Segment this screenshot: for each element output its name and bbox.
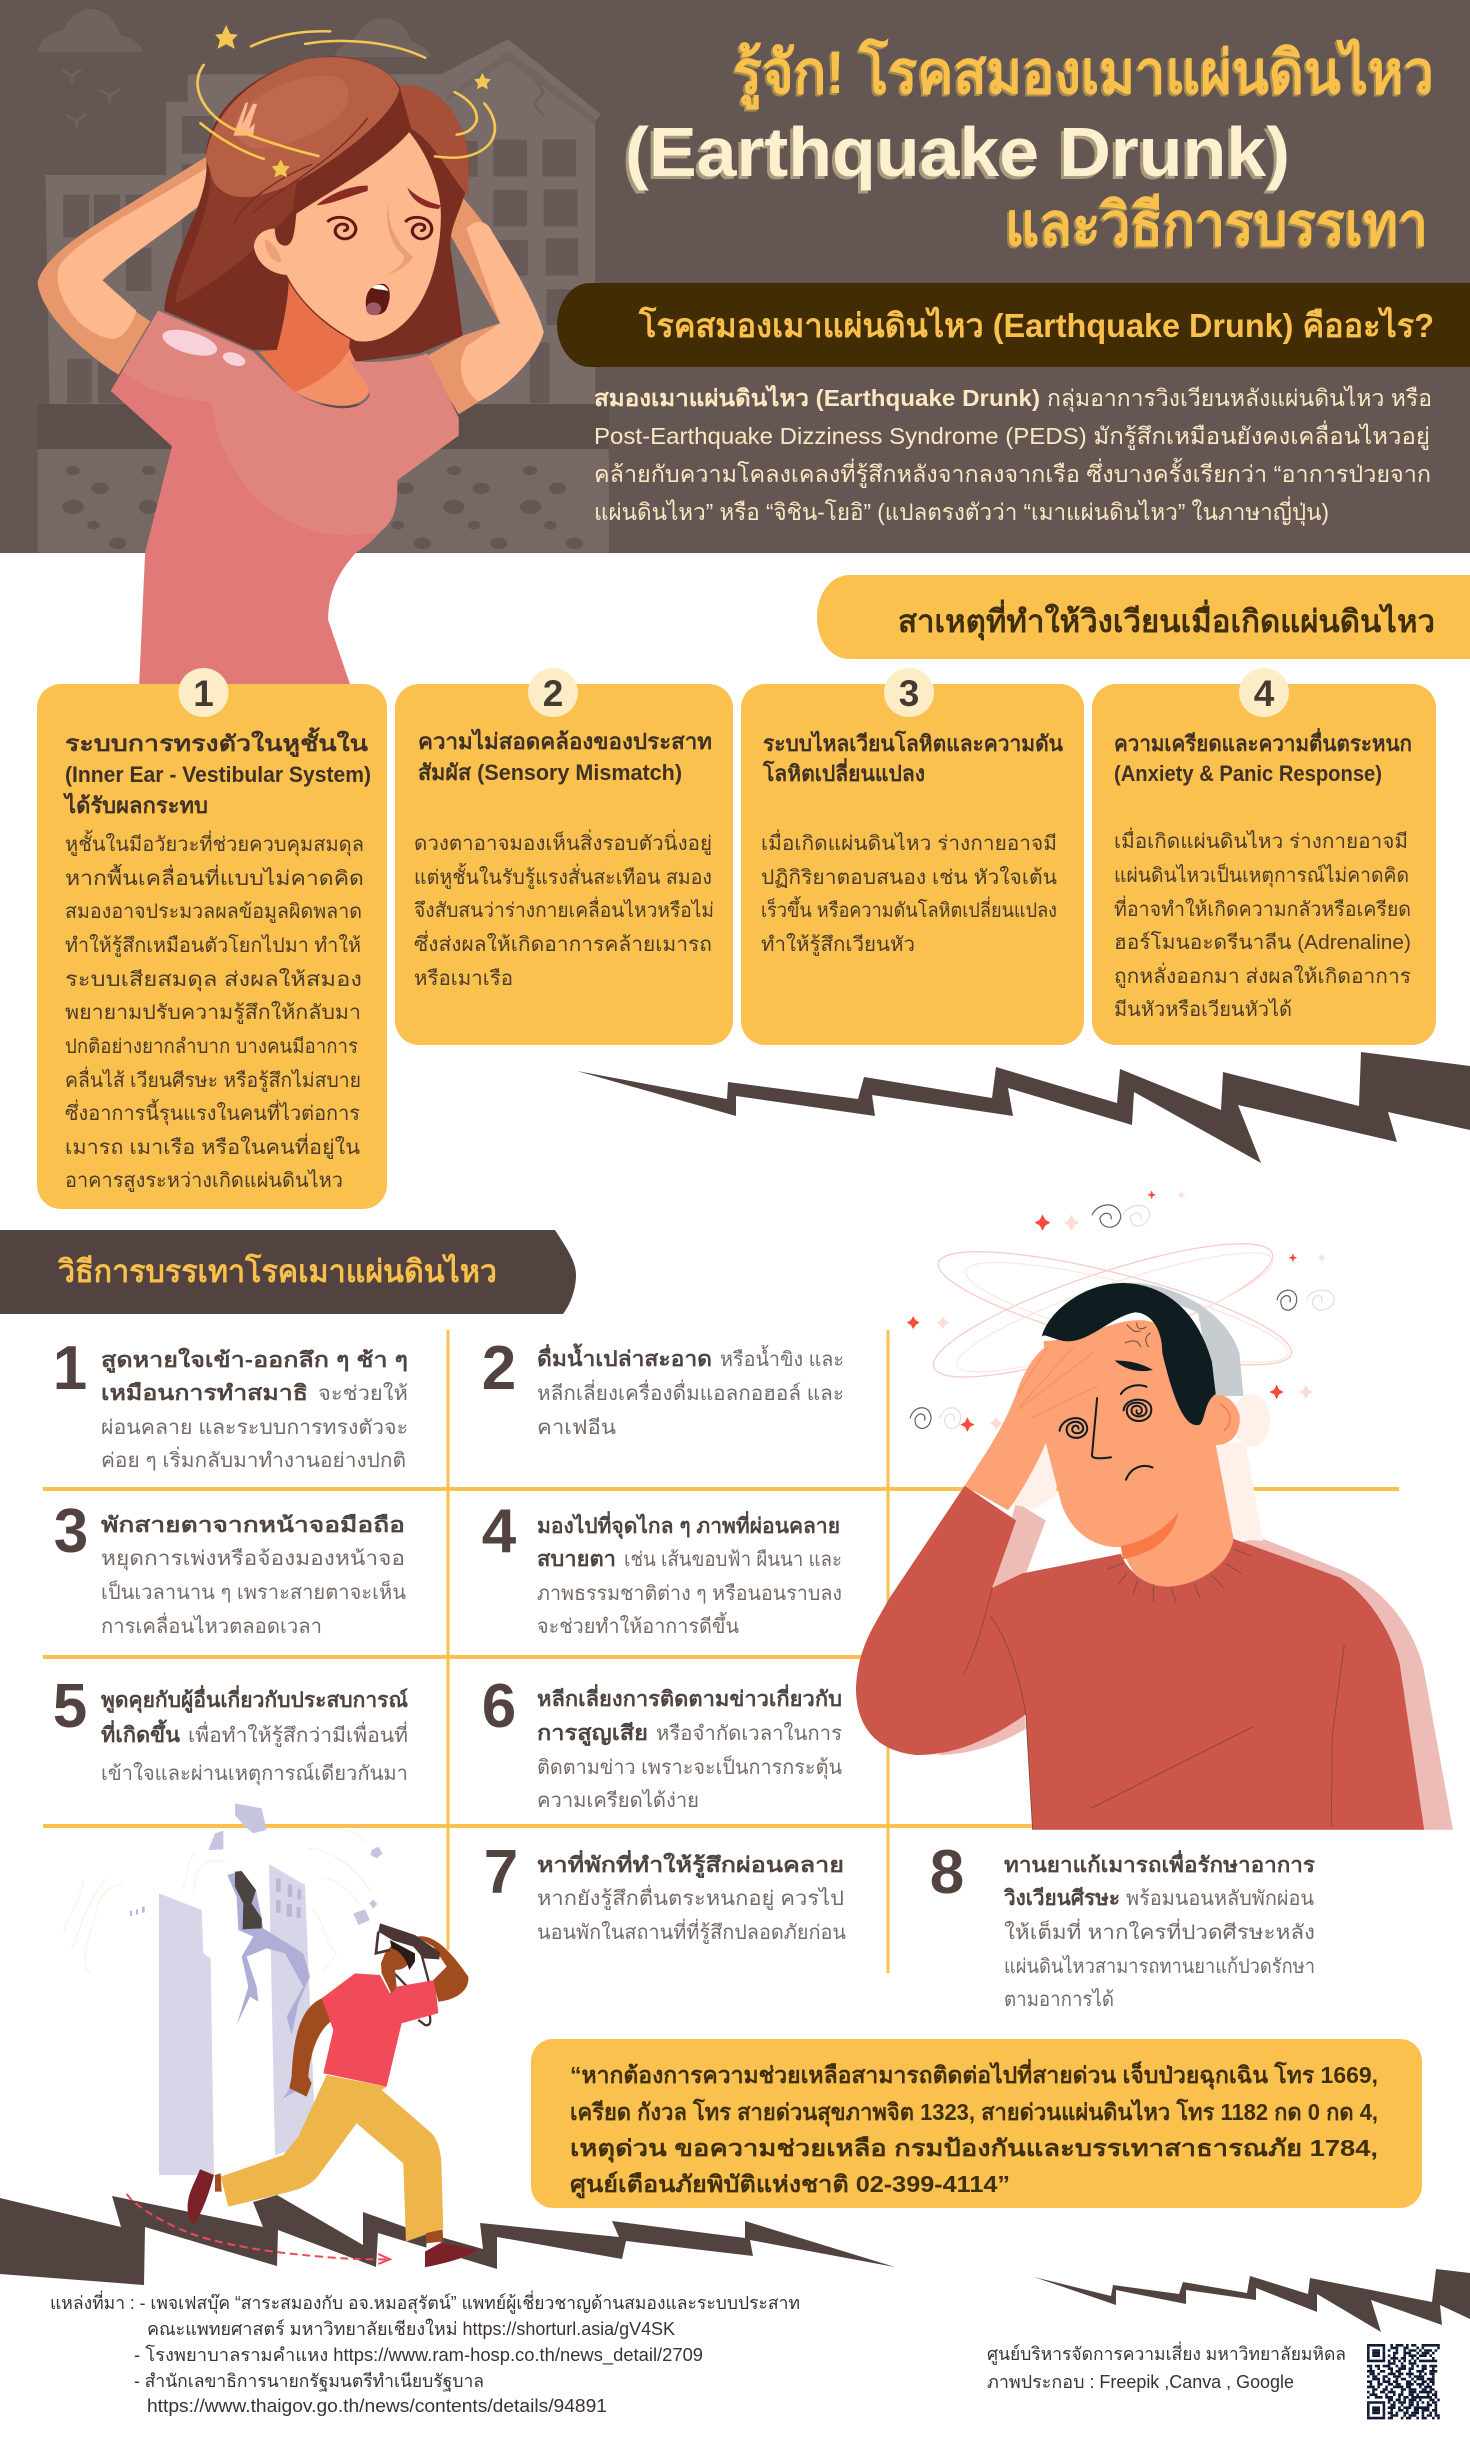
- tip 7: หากยังรู้สึกตื่นตระหนกอยู่ ควรไป: [537, 1884, 844, 1911]
- tip 8: ตามอาการได้: [1004, 1988, 1114, 2011]
- body: cause 1: คลื่นไส้ เวียนศีรษะ หรือรู้สึกไม่สบาย: [65, 1066, 361, 1093]
- tip 2: หรือน้ำขิง และ: [720, 1345, 844, 1371]
- tip 1: [53, 1334, 408, 1472]
- body: cause 1: สมองอาจประมวลผลข้อมูลผิดพลาด: [65, 901, 362, 924]
- heading: cause 2: ความไม่สอดคล้องของประสาท: [418, 728, 712, 754]
- text block: sources: แหล่งที่มา : - เพจเฟสบุ๊ค “สาระสมองกับ อจ.หมอสุรัตน์” แพทย์ผู้เชี่ยวชาญด้านสมองและระบบประสาท: [50, 2290, 800, 2314]
- text block: sources: - สำนักเลขาธิการนายกรัฐมนตรีทำเนียบรัฐบาล: [134, 2371, 484, 2392]
- body: cause 4: ฮอร์โมนอะดรีนาลีน (Adrenaline): [1114, 931, 1411, 954]
- body: cause 1: ซึ่งอาการนี้รุนแรงในคนที่ไวต่อการ: [65, 1099, 360, 1126]
- title: line 3: และวิธีการบรรเทา: [1005, 191, 1428, 258]
- number badge 2: [528, 668, 578, 717]
- callout: emergency hotlines: [531, 2039, 1422, 2208]
- heading: cause 4: [1114, 727, 1412, 786]
- tip 5: เข้าใจและผ่านเหตุการณ์เดียวกันมา: [101, 1762, 408, 1786]
- illustration: dizzy woman: [38, 25, 544, 684]
- text block: credits: [987, 2341, 1346, 2392]
- tip 1: จะช่วยให้: [318, 1382, 408, 1405]
- tip 3: พักสายตาจากหน้าจอมือถือ: [101, 1513, 405, 1537]
- tip 2: ดื่มน้ำเปล่าสะอาด: [537, 1343, 712, 1371]
- body: cause 2: แต่หูชั้นในรับรู้แรงสั่นสะเทือน สมอง: [414, 863, 712, 890]
- text block: definition: แผ่นดินไหว” หรือ “จิชิน-โยอิ” (แปลตรงตัวว่า “เมาแผ่นดินไหว” ในภาษาญี่ปุ่น): [594, 496, 1329, 526]
- banner: relief methods heading: วิธีการบรรเทาโรคเมาแผ่นดินไหว: [57, 1253, 497, 1289]
- panel: cause 1: [37, 668, 387, 1209]
- text block: definition: กลุ่มอาการวิงเวียนหลังแผ่นดินไหว หรือ: [1047, 385, 1432, 412]
- panel: cause 4: [1092, 668, 1436, 1045]
- tip 6: [482, 1672, 842, 1812]
- tip 6: หลีกเลี่ยงการติดตามข่าวเกี่ยวกับ: [537, 1683, 842, 1711]
- tip 4: เช่น เส้นขอบฟ้า ผืนนา และ: [624, 1549, 842, 1571]
- number badge 4: [1239, 668, 1289, 717]
- body: cause 1: ปกติอย่างยากลำบาก บางคนมีอาการ: [65, 1036, 358, 1058]
- body: cause 1: หากพื้นเคลื่อนที่แบบไม่คาดคิด: [65, 864, 364, 890]
- body: cause 1: ทำให้รู้สึกเหมือนตัวโยกไปมา ทำให้: [65, 934, 361, 958]
- tip 1: 1: [53, 1334, 87, 1403]
- body: cause 1: [65, 830, 364, 1193]
- tip 5: [53, 1672, 409, 1786]
- text block: definition: คล้ายกับความโคลงเคลงที่รู้สึกหลังจากลงจากเรือ ซึ่งบางครั้งเรียกว่า “อาการป่วยจาก: [594, 458, 1431, 488]
- tip 7: นอนพักในสถานที่ที่รู้สึกปลอดภัยก่อน: [537, 1918, 846, 1945]
- tip 4: มองไปที่จุดไกล ๆ ภาพที่ผ่อนคลาย: [537, 1510, 840, 1540]
- tip 3: 3: [54, 1497, 88, 1566]
- tip 4: จะช่วยทำให้อาการดีขึ้น: [537, 1612, 739, 1638]
- panel: header background: [0, 0, 1470, 553]
- tip 3: [54, 1497, 406, 1638]
- tip 8: ทานยาแก้เมารถเพื่อรักษาอาการ: [1004, 1849, 1316, 1877]
- heading: cause 1: ระบบการทรงตัวในหูชั้นใน: [65, 727, 368, 758]
- tip 3: การเคลื่อนไหวตลอดเวลา: [101, 1612, 322, 1638]
- heading: cause 4: ความเครียดและความตื่นตระหนก: [1114, 727, 1412, 756]
- panel: cause 2: [395, 668, 733, 1045]
- banner: what is earthquake drunk: [557, 283, 1470, 367]
- number badge 2: 2: [543, 673, 563, 714]
- tip 3: เป็นเวลานาน ๆ เพราะสายตาจะเห็น: [101, 1579, 406, 1604]
- tip 8: 8: [930, 1838, 964, 1907]
- tip 6: ติดตามข่าว เพราะจะเป็นการกระตุ้น: [537, 1754, 842, 1780]
- number badge 1: 1: [193, 673, 214, 714]
- heading: cause 2: สัมผัส (Sensory Mismatch): [418, 760, 682, 785]
- body: cause 1: เมารถ เมาเรือ หรือในคนที่อยู่ใน: [65, 1133, 360, 1160]
- text block: credits: ศูนย์บริหารจัดการความเสี่ยง มหาวิทยาลัยมหิดล: [987, 2341, 1346, 2365]
- number badge 4: 4: [1254, 673, 1275, 714]
- text block: definition: Post-Earthquake Dizziness Syndrome (PEDS) มักรู้สึกเหมือนยังคงเคลื่อนไหวอยู่: [594, 420, 1430, 450]
- decoration: lightning crack bottom right: [1034, 2269, 1470, 2332]
- heading: cause 3: โลหิตเปลี่ยนแปลง: [762, 757, 925, 786]
- heading: cause 1: (Inner Ear - Vestibular System): [65, 762, 371, 787]
- tip 6: 6: [482, 1672, 516, 1741]
- heading: cause 2: [418, 728, 712, 785]
- tip 2: คาเฟอีน: [537, 1417, 616, 1439]
- body: cause 3: ปฏิกิริยาตอบสนอง เช่น หัวใจเต้น: [761, 866, 1057, 889]
- heading: cause 4: (Anxiety & Panic Response): [1114, 761, 1382, 786]
- heading: cause 3: [762, 730, 1063, 786]
- callout: emergency hotlines: เครียด กังวล โทร สายด่วนสุขภาพจิต 1323, สายด่วนแผ่นดินไหว โทร 1182 กด 0 กด 4,: [570, 2098, 1378, 2127]
- tip 6: หรือจำกัดเวลาในการ: [656, 1722, 842, 1745]
- heading: cause 1: ได้รับผลกระทบ: [63, 792, 208, 818]
- tip 1: เหมือนการทำสมาธิ: [101, 1381, 308, 1405]
- illustration: dizzy man: [856, 1190, 1453, 1830]
- text block: sources: - โรงพยาบาลรามคำแหง https://www.ram-hosp.co.th/news_detail/2709: [134, 2344, 703, 2366]
- tip 5: 5: [53, 1672, 87, 1741]
- body: cause 3: เมื่อเกิดแผ่นดินไหว ร่างกายอาจมี: [761, 829, 1057, 855]
- body: cause 2: หรือเมาเรือ: [414, 968, 513, 990]
- banner: causes of dizziness: สาเหตุที่ทำให้วิงเวียนเมื่อเกิดแผ่นดินไหว: [898, 599, 1435, 641]
- text block: sources: [50, 2290, 800, 2416]
- callout: emergency hotlines: “หากต้องการความช่วยเหลือสามารถติดต่อไปที่สายด่วน เจ็บป่วยฉุกเฉิน โทร 1669,: [570, 2058, 1378, 2090]
- callout: emergency hotlines: ศูนย์เตือนภัยพิบัติแห่งชาติ 02-399-4114”: [570, 2171, 1010, 2199]
- callout: emergency hotlines: เหตุด่วน ขอความช่วยเหลือ กรมป้องกันและบรรเทาสาธารณภัย 1784,: [570, 2135, 1378, 2163]
- illustration: cracked buildings: [63, 1803, 383, 2175]
- text block: sources: คณะแพทยศาสตร์ มหาวิทยาลัยเชียงใหม่ https://shorturl.asia/gV4SK: [147, 2318, 675, 2339]
- title: line 2: (Earthquake Drunk): [625, 113, 1290, 191]
- body: cause 3: เร็วขึ้น หรือความดันโลหิตเปลี่ยนแปลง: [761, 896, 1057, 922]
- tip 7: [484, 1838, 846, 1945]
- heading: cause 1: [63, 727, 371, 818]
- body: cause 4: เมื่อเกิดแผ่นดินไหว ร่างกายอาจมี: [1114, 827, 1408, 853]
- tip 1: สูดหายใจเข้า-ออกลึก ๆ ช้า ๆ: [101, 1347, 408, 1374]
- tip 5: ที่เกิดขึ้น: [101, 1719, 181, 1747]
- body: cause 1: พยายามปรับความรู้สึกให้กลับมา: [65, 1001, 361, 1025]
- tip 2: หลีกเลี่ยงเครื่องดื่มแอลกอฮอล์ และ: [537, 1379, 844, 1405]
- body: cause 4: มีนหัวหรือเวียนหัวได้: [1114, 998, 1292, 1021]
- body: cause 4: [1114, 827, 1411, 1021]
- tip 6: ความเครียดได้ง่าย: [537, 1789, 699, 1812]
- tip 5: เพื่อทำให้รู้สึกว่ามีเพื่อนที่: [188, 1721, 408, 1748]
- tip 8: [930, 1838, 1316, 2011]
- tip 6: การสูญเสีย: [537, 1721, 648, 1747]
- banner: causes of dizziness: [817, 575, 1470, 659]
- banner: relief methods heading: [0, 1230, 576, 1314]
- body: cause 4: ถูกหลั่งออกมา ส่งผลให้เกิดอาการ: [1114, 962, 1411, 989]
- heading: cause 3: ระบบไหลเวียนโลหิตและความดัน: [763, 730, 1063, 756]
- tip 1: ค่อย ๆ เริ่มกลับมาทำงานอย่างปกติ: [101, 1446, 406, 1472]
- tip 4: สบายตา: [537, 1548, 616, 1571]
- tip 4: [482, 1497, 842, 1638]
- text block: definition: สมองเมาแผ่นดินไหว (Earthquake Drunk): [594, 384, 1040, 411]
- tip 7: หาที่พักที่ทำให้รู้สึกผ่อนคลาย: [537, 1849, 844, 1879]
- body: cause 4: แผ่นดินไหวเป็นเหตุการณ์ไม่คาดคิด: [1114, 862, 1409, 888]
- body: cause 2: [414, 829, 714, 990]
- tip 1: ผ่อนคลาย และระบบการทรงตัวจะ: [101, 1417, 408, 1439]
- body: cause 2: ซึ่งส่งผลให้เกิดอาการคล้ายเมารถ: [414, 930, 712, 956]
- icon: QR code: [1367, 2345, 1440, 2418]
- decoration: yellow grid lines: [43, 1330, 1399, 1973]
- body: cause 3: [761, 829, 1057, 957]
- body: cause 4: ที่อาจทำให้เกิดความกลัวหรือเครียด: [1114, 895, 1411, 921]
- text block: credits: ภาพประกอบ : Freepik ,Canva , Google: [987, 2372, 1294, 2392]
- number badge 3: [884, 668, 934, 717]
- tip 8: พร้อมนอนหลับพักผ่อน: [1126, 1888, 1314, 1910]
- tip 4: 4: [482, 1497, 517, 1566]
- tip 3: หยุดการเพ่งหรือจ้องมองหน้าจอ: [101, 1548, 405, 1571]
- tip 8: ให้เต็มที่ หากใครที่ปวดศีรษะหลัง: [1004, 1918, 1315, 1944]
- decoration: lightning crack top: [577, 1052, 1470, 1163]
- number badge 3: 3: [899, 673, 919, 714]
- decoration: lightning crack bottom left: [0, 2195, 895, 2285]
- tip 8: แผ่นดินไหวสามารถทานยาแก้ปวดรักษา: [1004, 1955, 1315, 1978]
- body: cause 1: ระบบเสียสมดุล ส่งผลให้สมอง: [65, 968, 362, 992]
- body: cause 1: หูชั้นในมีอวัยวะที่ช่วยควบคุมสมดุล: [65, 830, 364, 857]
- illustration: city background: [38, 9, 609, 553]
- text block: definition: [594, 384, 1432, 526]
- tip 4: ภาพธรรมชาติต่าง ๆ หรือนอนราบลง: [537, 1583, 842, 1605]
- panel: cause 3: [741, 668, 1084, 1045]
- banner: what is earthquake drunk: โรคสมองเมาแผ่นดินไหว (Earthquake Drunk) คืออะไร?: [638, 306, 1434, 344]
- tip 2: 2: [482, 1334, 516, 1403]
- tip 2: [482, 1334, 844, 1439]
- tip 5: พูดคุยกับผู้อื่นเกี่ยวกับประสบการณ์: [101, 1684, 409, 1714]
- illustration: running man: [127, 1923, 478, 2267]
- number badge 1: [178, 668, 228, 717]
- body: cause 2: จึงสับสนว่าร่างกายเคลื่อนไหวหรือไม่: [414, 896, 714, 922]
- body: cause 2: ดวงตาอาจมองเห็นสิ่งรอบตัวนิ่งอยู่: [414, 829, 712, 856]
- tip 7: 7: [484, 1838, 518, 1907]
- text block: sources: https://www.thaigov.go.th/news/contents/details/94891: [147, 2396, 607, 2416]
- body: cause 1: อาคารสูงระหว่างเกิดแผ่นดินไหว: [65, 1169, 343, 1193]
- tip 8: วิงเวียนศีรษะ: [1003, 1886, 1120, 1910]
- body: cause 3: ทำให้รู้สึกเวียนหัว: [761, 933, 915, 957]
